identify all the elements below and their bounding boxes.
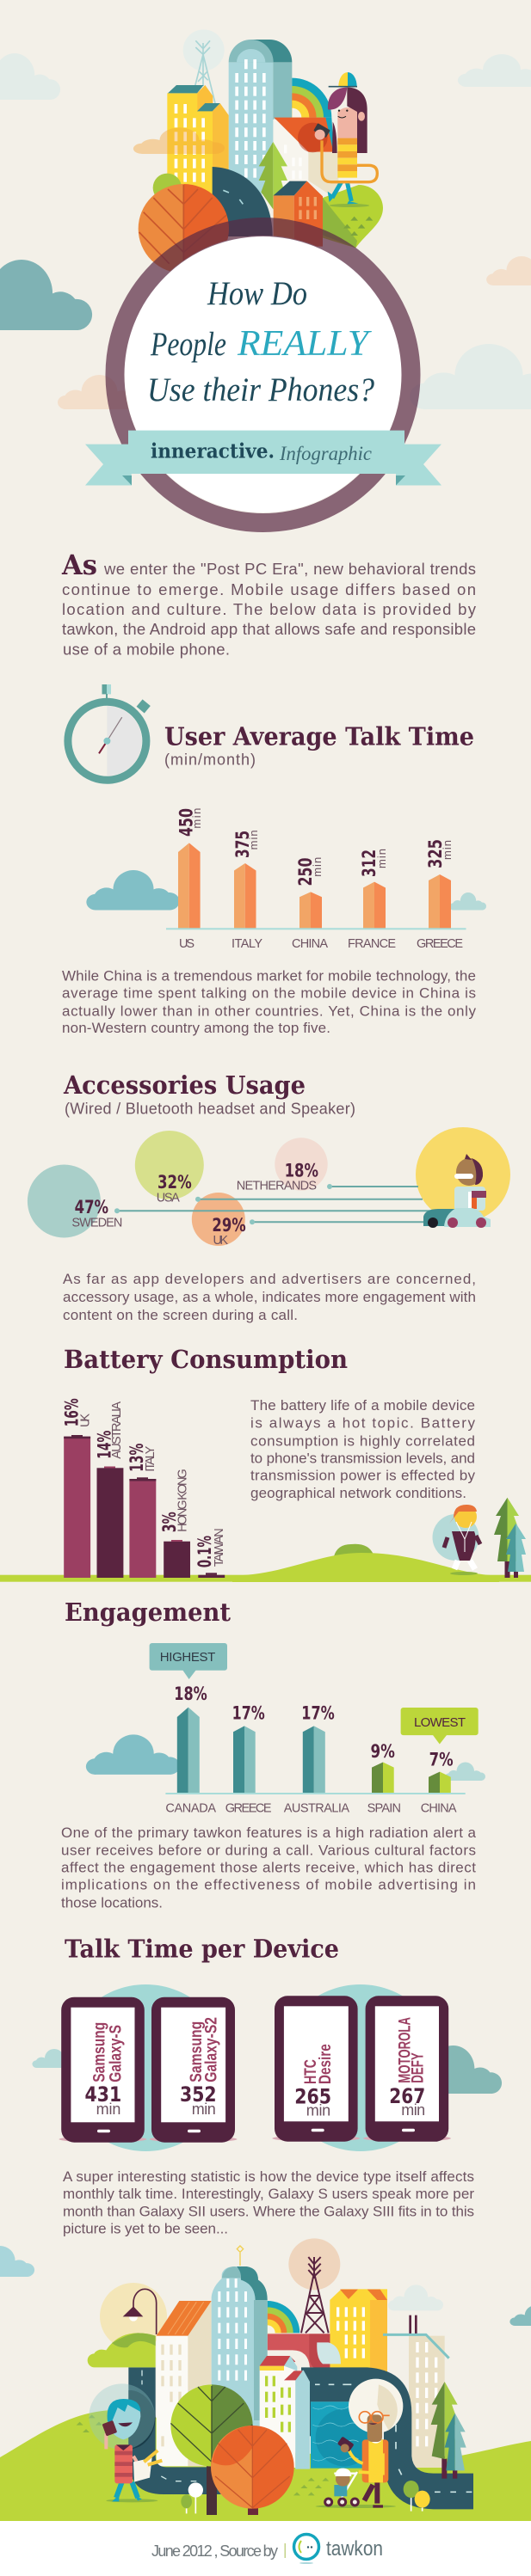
bubble chart: accessories usage: 47% <box>75 1197 108 1217</box>
paragraph: device: picture is yet to be seen... <box>63 2221 228 2237</box>
bar chart: talk time: min <box>190 808 203 829</box>
footer band <box>0 2521 531 2576</box>
phone: Samsung Galaxy-S2: Samsung <box>188 2021 206 2082</box>
paragraph: accessories: accessory usage, as a whole, indicates more engagement with <box>63 1289 476 1305</box>
character: woman with afro and stroller <box>316 2379 403 2508</box>
bar chart: talk time <box>86 808 486 951</box>
logo: tawkon wordmark: tawkon <box>326 2537 383 2561</box>
bubble chart: accessories usage: 29% <box>212 1215 246 1236</box>
phone: Samsung Galaxy-S <box>61 1997 145 2143</box>
character: jogger <box>432 1505 480 1575</box>
phone: Motorola Defy: min <box>401 2101 425 2119</box>
bar chart: battery consumption: 13% <box>127 1444 147 1472</box>
phone: HTC Desire: min <box>306 2102 330 2119</box>
title: REALLY <box>237 324 373 364</box>
lamp post <box>123 2289 157 2334</box>
bubble chart: accessories usage: NETHERANDS <box>237 1180 317 1193</box>
bar chart: talk time: FRANCE <box>348 937 396 951</box>
bar chart: talk time: 325 <box>425 839 446 868</box>
bar chart: engagement <box>86 1684 485 1816</box>
paragraph: engagement <box>61 1825 477 1911</box>
ribbon banner: Infographic <box>279 443 372 464</box>
phone: Samsung Galaxy-S: min <box>96 2101 120 2118</box>
title circle: white disc <box>124 236 401 512</box>
bubble chart: accessories usage: USA <box>157 1192 180 1205</box>
paragraph: accessories: content on the screen during a call. <box>63 1307 298 1323</box>
bar chart: talk time: 375 <box>232 831 253 858</box>
icon: stopwatch <box>68 684 151 780</box>
paragraph: engagement: implications on the effectiveness of mobile advertising in <box>61 1877 476 1893</box>
paragraph: engagement: user receives before or during a call. Various cultural factors <box>61 1842 476 1858</box>
phone: Samsung Galaxy-S: Galaxy-S <box>107 2025 125 2082</box>
intro text <box>61 549 477 659</box>
heading: talk time per device: Talk Time per Device <box>65 1935 339 1964</box>
bubble chart: accessories usage: 32% <box>157 1172 192 1193</box>
bubble chart: accessories usage: UK <box>213 1234 228 1248</box>
paragraph: talk time: actually lower than in other countries. Yet, China is the only <box>62 1003 477 1019</box>
phone: Motorola Defy: DEFY <box>409 2052 427 2083</box>
paragraph: battery: transmission power is effected by <box>250 1468 475 1484</box>
paragraph: battery: consumption is highly correlated <box>250 1432 475 1449</box>
paragraph: device: monthly talk time. Interestingly, Galaxy S users speak more per <box>63 2186 474 2202</box>
paragraph: battery <box>250 1397 475 1501</box>
bar chart: engagement: 18% <box>174 1684 207 1704</box>
phone: HTC Desire <box>275 1996 358 2142</box>
phone: HTC Desire: 265 <box>294 2085 331 2109</box>
intro text: location and culture. The below data is provided by <box>62 600 477 618</box>
bar chart: talk time: 450 <box>176 808 196 837</box>
bar chart: battery consumption: HONG KONG <box>176 1469 190 1532</box>
bar chart: battery consumption: TAIWAN <box>213 1528 226 1567</box>
title <box>147 275 374 408</box>
phone: Samsung Galaxy-S2: 352 <box>180 2082 217 2107</box>
phone: Samsung Galaxy-S: 431 <box>84 2082 121 2107</box>
ground: footer hills <box>0 2410 531 2521</box>
bar chart: talk time: min <box>441 840 454 860</box>
paragraph: engagement: One of the primary tawkon features is a high radiation alert a <box>61 1825 477 1841</box>
heading: engagement: Engagement <box>65 1598 232 1627</box>
character: girl with phone <box>313 72 377 207</box>
ribbon banner <box>85 431 441 485</box>
paragraph: device <box>63 2168 474 2237</box>
paragraph: talk time <box>62 967 477 1036</box>
phone: HTC Desire: Desire <box>317 2044 335 2084</box>
intro text: we enter the "Post PC Era", new behavioral trends <box>103 560 476 578</box>
bar chart: battery consumption <box>61 1398 226 1578</box>
paragraph: accessories <box>63 1271 476 1323</box>
bar chart: engagement: SPAIN <box>367 1802 401 1816</box>
bar chart: battery consumption: UK <box>78 1414 92 1427</box>
intro text: tawkon, the Android app that allows safe and responsible <box>62 620 476 638</box>
paragraph: battery: The battery life of a mobile device <box>250 1397 475 1414</box>
bar chart: talk time: min <box>311 857 324 877</box>
bar chart: engagement: GREECE <box>225 1802 272 1816</box>
ribbon banner: inneractive. <box>151 440 275 463</box>
phone: HTC Desire: HTC <box>302 2059 320 2084</box>
phone: Samsung Galaxy-S2: min <box>192 2101 216 2118</box>
bar chart: battery consumption: ITALY <box>144 1445 157 1472</box>
bar chart: talk time: CHINA <box>292 937 328 951</box>
header city illustration <box>133 29 383 273</box>
bar chart: talk time: 250 <box>295 858 316 886</box>
logo: tawkon icon <box>294 2535 318 2564</box>
callout: lowest <box>401 1708 479 1744</box>
paragraph: engagement: those locations. <box>61 1894 163 1911</box>
footer city illustration <box>77 2238 473 2515</box>
phone: Motorola Defy: MOTOROLA <box>396 2017 414 2083</box>
bubble chart: accessories usage <box>28 1127 510 1248</box>
bar chart: talk time: ITALY <box>232 937 262 951</box>
background clouds: footer <box>0 2246 531 2326</box>
bar chart: engagement: 17% <box>301 1702 335 1723</box>
bubble chart: accessories usage: 18% <box>285 1160 318 1181</box>
phone: Motorola Defy: 267 <box>389 2084 425 2108</box>
title: Use their Phones? <box>147 371 374 408</box>
phone: Samsung Galaxy-S2: Galaxy-S2 <box>203 2017 221 2082</box>
bubble chart: accessories usage: SWEDEN <box>71 1217 122 1230</box>
callout: highest <box>150 1643 227 1679</box>
bar chart: engagement: CHINA <box>421 1802 457 1816</box>
bar chart: talk time: US <box>179 937 194 951</box>
intro text: continue to emerge. Mobile usage differs based on <box>62 580 476 598</box>
bar chart: engagement: 17% <box>232 1702 265 1723</box>
intro text: use of a mobile phone. <box>63 640 230 659</box>
paragraph: engagement: affect the engagement those alerts receive, which has direct <box>61 1860 476 1876</box>
bar chart: talk time: min <box>375 849 388 868</box>
title: People <box>150 326 226 363</box>
paragraph: device: month than Galaxy SII users. Where the Galaxy SIII fits in to this <box>63 2203 474 2220</box>
phone: Samsung Galaxy-S: Samsung <box>91 2022 109 2082</box>
phone: Motorola Defy <box>366 1996 448 2142</box>
paragraph: talk time: While China is a tremendous market for mobile technology, the <box>62 967 476 984</box>
plants <box>181 2481 430 2513</box>
callout: highest: HIGHEST <box>160 1650 215 1665</box>
intro text: As <box>61 549 97 581</box>
phone: Samsung Galaxy-S2 <box>151 1997 235 2143</box>
grass tufts <box>77 2414 329 2495</box>
pine trees <box>431 2382 466 2479</box>
character: woman with teal hair <box>89 2383 162 2502</box>
paragraph: talk time: average time spent talking on the mobile device in China is <box>62 985 476 1002</box>
paragraph: device: A super interesting statistic is how the device type itself affects <box>63 2168 474 2185</box>
paragraph: battery: is always a hot topic. Battery <box>250 1414 475 1431</box>
footer source text: June 2012 , Source by <box>151 2542 278 2560</box>
paragraph: talk time: non-Western country among the top five. <box>62 1020 330 1036</box>
title: How Do <box>207 275 307 312</box>
bar chart: talk time: min <box>247 830 260 849</box>
subheading: min per month: (min/month) <box>164 751 256 769</box>
bar chart: engagement: AUSTRALIA <box>284 1802 349 1816</box>
bar chart: engagement: 9% <box>370 1741 395 1762</box>
bar chart: talk time: GREECE <box>417 937 463 951</box>
heading: accessories usage: Accessories Usage <box>63 1070 306 1100</box>
paragraph: battery: geographical network conditions. <box>250 1485 466 1501</box>
heading: battery consumption: Battery Consumption <box>64 1345 348 1374</box>
icon: pine trees <box>494 1498 526 1578</box>
title circle: translucent ring <box>115 227 411 523</box>
bar chart: battery consumption: 3% <box>159 1512 180 1532</box>
heading: user average talk time: User Average Talk Time <box>164 722 474 751</box>
ground: green hill <box>0 1544 531 1582</box>
bar chart: battery consumption: 0.1% <box>194 1536 215 1567</box>
bar chart: battery consumption: AUSTRALIA <box>110 1401 124 1459</box>
character: man driving car <box>423 1154 491 1228</box>
bar chart: engagement: CANADA <box>165 1802 216 1816</box>
device backdrop: circles and clouds <box>32 1984 502 2151</box>
bar chart: battery consumption: 14% <box>94 1431 114 1459</box>
bar chart: engagement: 7% <box>429 1749 454 1769</box>
callout: lowest: LOWEST <box>414 1715 466 1730</box>
paragraph: battery: to phone's transmission levels, and <box>250 1450 475 1466</box>
bar chart: talk time: 312 <box>359 849 380 877</box>
divider bar <box>284 2543 286 2558</box>
paragraph: accessories: As far as app developers and advertisers are concerned, <box>63 1271 476 1287</box>
bar chart: battery consumption: 16% <box>61 1398 82 1426</box>
background clouds: header <box>0 53 531 409</box>
subheading: accessories: (Wired / Bluetooth headset and Speaker) <box>65 1101 355 1118</box>
